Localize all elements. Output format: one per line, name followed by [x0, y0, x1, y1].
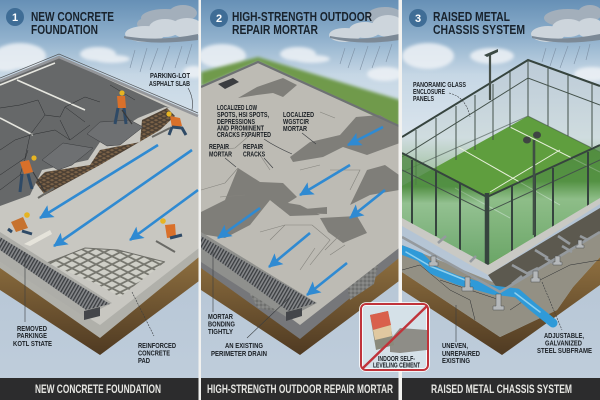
base frame [402, 198, 600, 275]
heading 3: RAISED METAL [433, 10, 510, 24]
light pole rear [484, 49, 498, 100]
heading 3 [433, 10, 525, 37]
panel: new concrete foundation [0, 0, 205, 400]
sky background [201, 0, 398, 102]
label: reinforced concrete pad: REINFORCED [138, 343, 176, 350]
rear glass wall [402, 60, 600, 190]
label: repair cracks: CRACKS [243, 152, 265, 158]
concrete blocks under slab [250, 265, 378, 311]
rear wall frame [402, 60, 600, 185]
caption bar 2: HIGH-STRENGTH OUTDOOR REPAIR MORTAR [207, 384, 393, 396]
perimeter drain [201, 232, 317, 321]
slab: soil side [201, 255, 399, 355]
heading 2: HIGH-STRENGTH OUTDOOR [232, 10, 372, 24]
slab: new concrete top [0, 57, 199, 325]
label: localized low spots: CRACKS FXPAIRTED [217, 132, 271, 139]
workers [8, 90, 186, 252]
adjustable feet [429, 240, 584, 310]
caption bar 1 [0, 378, 199, 400]
heading marker 1 [6, 8, 24, 26]
caption bar 3 [402, 378, 600, 400]
white clouds [198, 44, 403, 81]
label: adjustable galvanized steel subframe: GALVANIZED [545, 340, 582, 348]
grass strip [201, 57, 400, 130]
roof drain [218, 78, 239, 89]
label: existing perimeter drain: AN EXISTING [225, 343, 263, 350]
inset red border [361, 304, 428, 370]
front green glass walls [402, 153, 487, 265]
mortar patches [201, 78, 400, 243]
inset: not indoor self-leveling cement [361, 304, 428, 370]
panel: high-strength outdoor repair mortar [198, 0, 404, 400]
label: existing perimeter drain [211, 297, 290, 358]
parapet edge [201, 62, 399, 126]
sky background [0, 0, 198, 117]
asphalt cracks [0, 85, 135, 190]
label: parking-lot asphalt slab [149, 73, 192, 110]
blue flow arrows [218, 127, 385, 295]
broken asphalt pieces [42, 120, 143, 170]
storm cloud with rain [329, 7, 404, 70]
label: reinforced concrete pad [132, 292, 176, 365]
white clouds [402, 43, 600, 81]
label: localized mortar: MORTAR [283, 126, 307, 133]
lower background [201, 249, 398, 378]
front wall frame [402, 145, 600, 267]
heading 2: REPAIR MORTAR [232, 23, 318, 37]
label: removed parking [13, 252, 52, 348]
sky background [402, 0, 600, 150]
label: removed parking: KOTL STtATE [13, 341, 52, 348]
label: localized low spots: AND PROMINENT [217, 126, 265, 132]
label: repair cracks: REPAIR [243, 144, 263, 151]
heading marker 1: 1 [12, 12, 18, 24]
slab: side concrete [201, 248, 399, 339]
label: removed parking: REMOVED [17, 326, 47, 333]
label: reinforced concrete pad: PAD [138, 358, 150, 365]
court lines [455, 127, 600, 218]
slab: concrete top [201, 62, 399, 325]
label: localized low spots [217, 105, 292, 154]
label: uneven unrepaired existing [442, 305, 480, 365]
label: parking-lot asphalt slab: PARKING-LOT [150, 73, 191, 80]
caption bar 2 [201, 378, 399, 400]
shaded ground under frame [488, 208, 600, 292]
cracks [201, 112, 360, 265]
prohibition stroke [363, 306, 427, 368]
slab: soil side [0, 255, 199, 355]
heading 3: CHASSIS SYSTEM [433, 23, 525, 37]
label: localized mortar: LOCALIZED [283, 112, 314, 119]
label: repair mortar: REPAIR [209, 144, 229, 151]
label: panoramic glass enclosure panels: ENCLOSURE [413, 89, 445, 96]
storm cloud with rain [531, 5, 600, 68]
inset caption [373, 356, 421, 370]
label: parking-lot asphalt slab: ASPHALT SLAB [149, 81, 190, 88]
label: panoramic glass enclosure panels: PANELS [413, 96, 434, 103]
label: mortar bonding tightly [208, 250, 235, 336]
inset caption: INDOOR SELF- [378, 356, 415, 363]
ground cracks [402, 260, 600, 320]
label: uneven unrepaired existing: UNREPAIRED [442, 351, 480, 358]
label: reinforced concrete pad: CONCRETE [138, 350, 170, 358]
label: adjustable galvanized steel subframe: ADJUSTABLE, [544, 333, 584, 340]
uneven ground top [402, 215, 600, 337]
heading marker 3: 3 [415, 13, 421, 25]
label: uneven unrepaired existing: EXISTING [442, 358, 470, 365]
water channel [402, 250, 553, 323]
label: repair cracks [243, 144, 273, 168]
exposed rebar trench [35, 108, 175, 195]
mesh pad [47, 248, 165, 297]
label: localized low spots: SPOTS, HSI SPOTS, [217, 112, 269, 119]
label: existing perimeter drain: PERIMETER DRAIN [211, 351, 267, 358]
label: uneven unrepaired existing: UNEVEN, [442, 343, 468, 350]
concrete lip over mesh [47, 248, 165, 263]
inset caption: LEVELING CEMENT [373, 362, 421, 370]
blue flow arrows [40, 145, 198, 246]
storm cloud with rain [124, 5, 203, 72]
cracked floor sample [390, 328, 427, 353]
heading 2 [232, 10, 372, 37]
label: removed parking: PARKINGE [17, 333, 47, 340]
heading 1: FOUNDATION [31, 23, 98, 37]
label: localized mortar [283, 112, 316, 144]
heading marker 2: 2 [216, 13, 222, 25]
lower background [402, 150, 600, 380]
cement bag icon [370, 311, 394, 350]
label: localized low spots: DEPRESSIONS [217, 119, 255, 126]
label: adjustable galvanized steel subframe [537, 282, 592, 355]
slab: concrete edge [0, 248, 199, 338]
light pole front [523, 132, 541, 235]
label: adjustable galvanized steel subframe: STEEL SUBFRAME [537, 348, 592, 355]
label: mortar bonding tightly: MORTAR [208, 314, 233, 321]
label: mortar bonding tightly: TIGHTLY [208, 329, 233, 336]
label: panoramic glass enclosure panels: PANORAMIC GLASS [413, 82, 466, 89]
label: localized low spots: LOCALIZED LOW [217, 105, 257, 112]
caption bar 1: NEW CONCRETE FOUNDATION [35, 384, 161, 396]
label: mortar bonding tightly: BONDING [208, 322, 235, 328]
old asphalt slab [0, 57, 170, 206]
ground soil side [402, 257, 600, 355]
subframe rails [402, 232, 600, 292]
parapet edge [0, 57, 198, 116]
heading 1 [32, 12, 114, 34]
label: localized mortar: WGSTCIR [283, 119, 309, 126]
court surface [402, 116, 600, 270]
label: repair mortar: MORTAR [209, 152, 232, 158]
heading 1: NEW CONCRETE [31, 10, 114, 24]
heading marker 3 [409, 9, 427, 27]
heading marker 2 [210, 9, 228, 27]
lower background [0, 249, 198, 378]
panel: raised metal chassis system [402, 0, 600, 400]
label: panoramic glass enclosure panels [413, 82, 470, 117]
parking lines [0, 63, 85, 135]
label: repair mortar [209, 144, 236, 167]
perimeter drain [0, 232, 112, 320]
white clouds [0, 43, 205, 78]
